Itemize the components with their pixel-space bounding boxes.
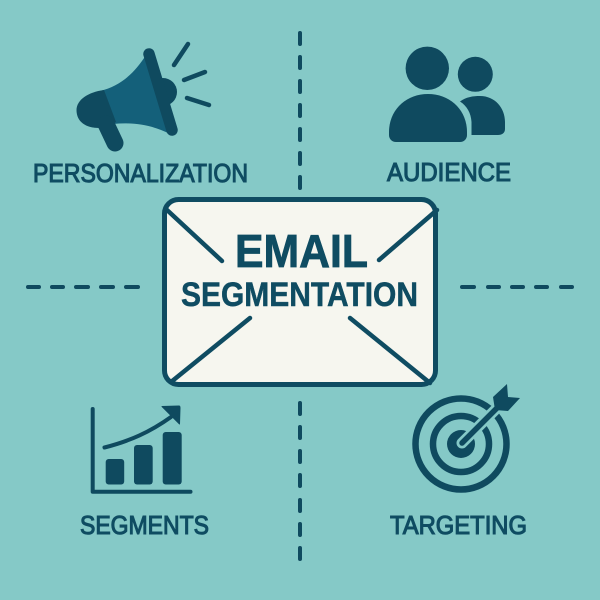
dashed divider: left [28,285,138,289]
label: audience: AUDIENCE [387,157,511,187]
title: email: EMAIL [235,225,368,277]
icon: target with arrow [416,384,520,490]
label: targeting: TARGETING [390,510,527,540]
dashed divider: bottom [298,403,302,559]
label: segments: SEGMENTS [80,510,209,540]
icon: audience [389,47,505,142]
dashed divider: right [462,285,572,289]
icon: megaphone [76,44,209,143]
icon: bar chart with arrow [93,406,190,492]
label: personalization: PERSONALIZATION [33,158,248,188]
title: segmentation: SEGMENTATION [181,276,418,314]
dashed divider: top [298,33,302,188]
envelope [164,200,437,384]
